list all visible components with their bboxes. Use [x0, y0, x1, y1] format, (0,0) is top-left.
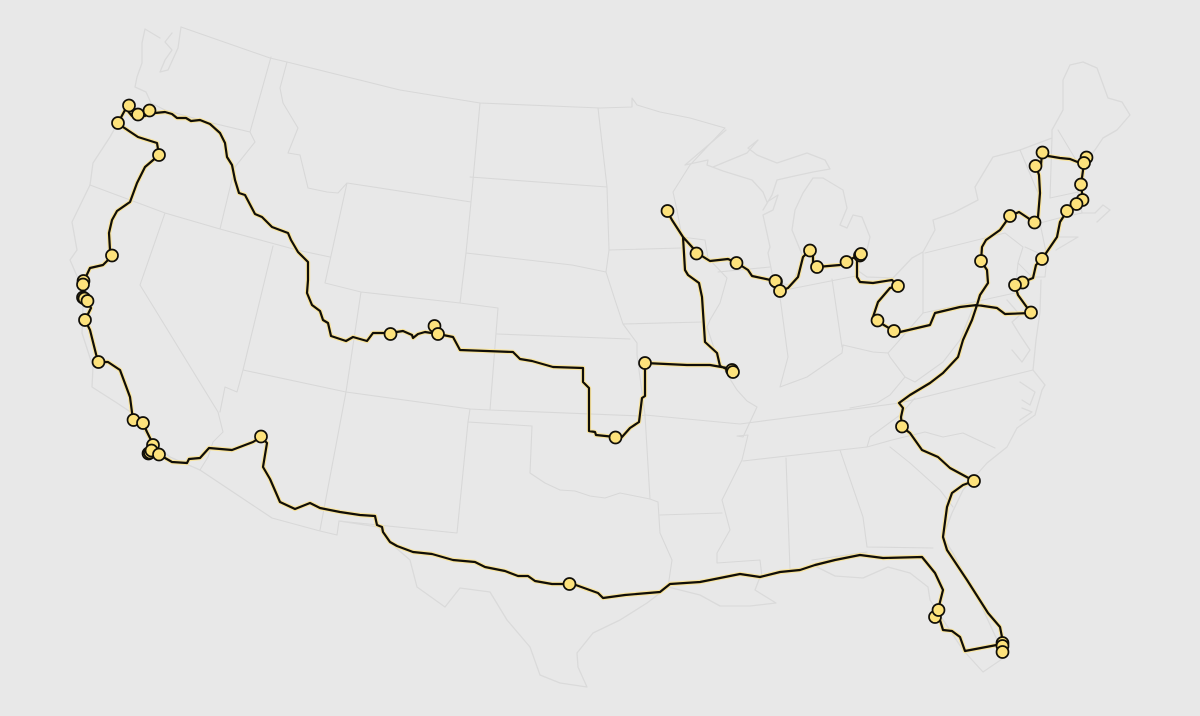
- route line: [83, 105, 1087, 652]
- stop markers: [77, 100, 1092, 658]
